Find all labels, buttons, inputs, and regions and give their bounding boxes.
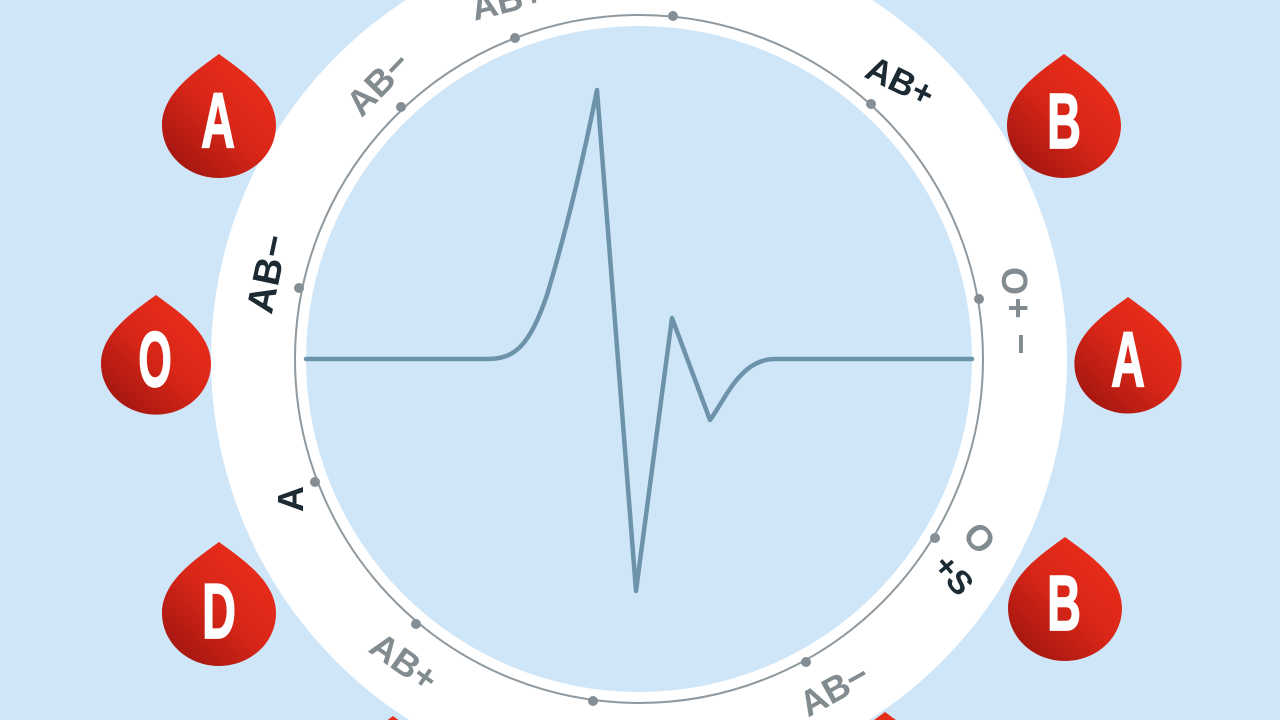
blood drop D lower left: D bbox=[202, 568, 236, 655]
label: O+ - right: + bbox=[998, 297, 1039, 319]
label: AB+ upper right: AB+ bbox=[860, 49, 940, 115]
blood drop B top right bbox=[1007, 54, 1121, 178]
inner dial circle bbox=[306, 26, 972, 692]
blood drop B lower right: B bbox=[1047, 560, 1081, 647]
blood drop A right bbox=[1074, 297, 1182, 414]
label: A left: A bbox=[270, 486, 311, 512]
label: O and glyph lower right: +S bbox=[926, 547, 981, 602]
dial tick dots bbox=[294, 11, 984, 706]
blood drop bottom right, clipped bbox=[828, 712, 942, 720]
blood drop B lower right bbox=[1008, 537, 1122, 661]
blood drop bottom left, clipped bbox=[336, 716, 450, 720]
heartbeat line bbox=[306, 90, 972, 591]
white ring bbox=[211, 0, 1067, 720]
blood drop B top right: B bbox=[1047, 78, 1081, 165]
blood drop O left: O bbox=[138, 317, 172, 403]
thin dial outline bbox=[295, 15, 983, 703]
blood drop A top left bbox=[162, 54, 276, 178]
label: O+ - right: − bbox=[1001, 333, 1042, 355]
label: AB+ lower left: AB+ bbox=[362, 624, 446, 699]
label: O and glyph lower right bbox=[926, 514, 1004, 602]
blood drop A right: A bbox=[1111, 316, 1145, 403]
label: AB- left: AB− bbox=[239, 230, 297, 317]
label: O+ - right: O bbox=[994, 267, 1035, 295]
label: O and glyph lower right: O bbox=[955, 514, 1004, 562]
label: AB- upper left: AB− bbox=[338, 43, 418, 124]
blood drop O left bbox=[101, 295, 211, 415]
blood drop D lower left bbox=[162, 542, 276, 666]
blood drop A top left: A bbox=[201, 77, 235, 164]
label: O+ - right bbox=[994, 267, 1042, 355]
